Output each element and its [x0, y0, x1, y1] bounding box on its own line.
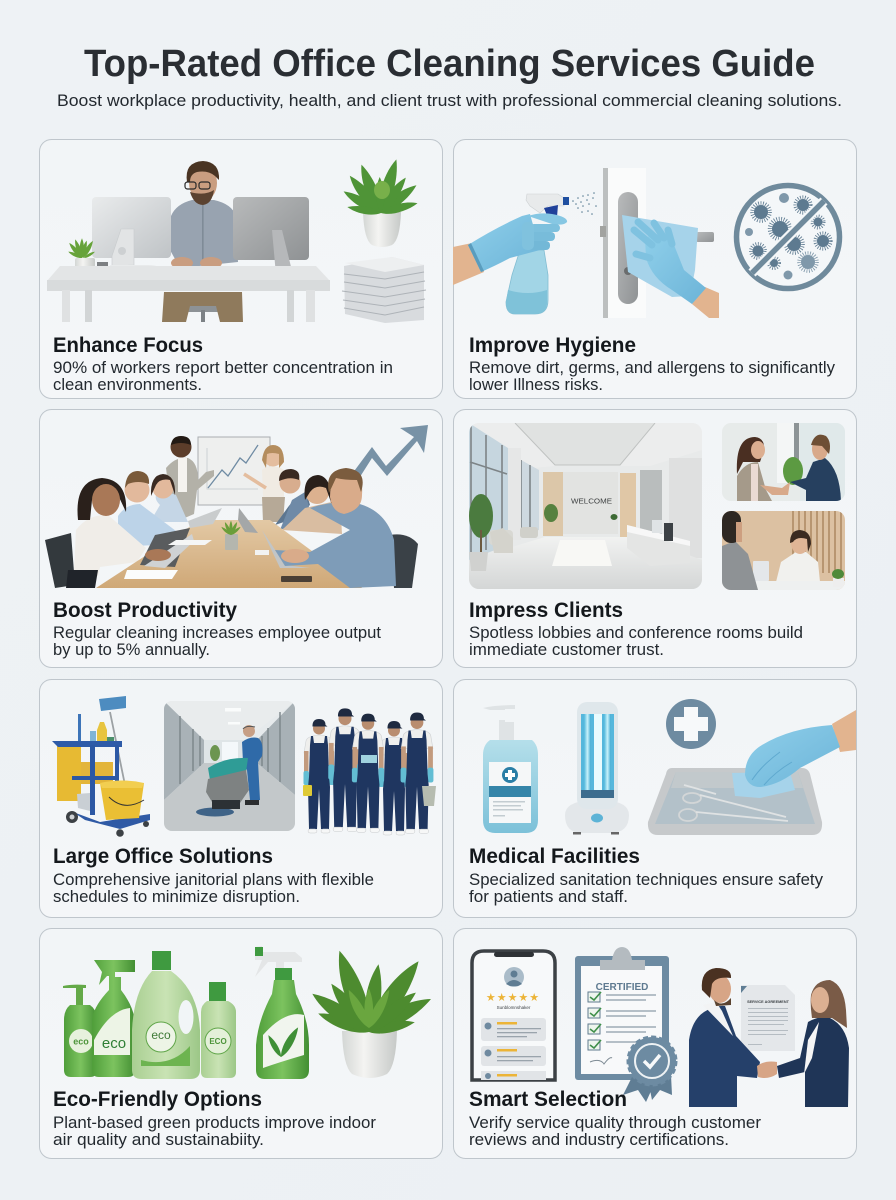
description: Plant-based green products improve indoor [53, 1114, 377, 1132]
panel: impress clients [454, 410, 856, 668]
illustration: eco cleaning bottles: ECO [209, 1037, 227, 1046]
description: reviews and industry certifications. [469, 1131, 729, 1149]
illustration: eco cleaning bottles [63, 946, 309, 1079]
illustration: certified clipboard with badge: CERTIFIED [596, 982, 648, 993]
heading: Large Office Solutions [53, 845, 273, 868]
heading: Smart Selection [469, 1088, 627, 1111]
description: Verify service quality through customer [469, 1114, 762, 1132]
illustration: UV sanitizing lamp [565, 702, 629, 834]
illustration: gloved hands spraying and wiping door handle, no-germs icon [453, 168, 840, 318]
description: Comprehensive janitorial plans with flexible [53, 871, 374, 889]
heading: Eco-Friendly Options [53, 1088, 262, 1111]
description: air quality and sustainabiity. [53, 1131, 264, 1149]
description [53, 624, 381, 659]
illustration: cleaning team in overalls [303, 708, 436, 835]
description: Regular cleaning increases employee output [53, 624, 381, 642]
illustration: businesspeople shaking hands with contract [689, 968, 849, 1107]
description: for patients and staff. [469, 888, 628, 906]
illustration: business handshake photo [722, 423, 845, 501]
heading: Enhance Focus [53, 334, 203, 357]
illustration: man working at desk with plants and papers [47, 158, 426, 323]
illustration: eco cleaning bottles: eco [151, 1028, 171, 1042]
illustration: potted plant [308, 948, 434, 1078]
illustration: floor scrubber in corridor photo [164, 701, 295, 831]
illustration: janitorial cart [52, 696, 150, 837]
illustration: eco cleaning bottles: eco [102, 1035, 126, 1052]
description: Spotless lobbies and conference rooms build [469, 624, 803, 642]
description: schedules to minimize disruption. [53, 888, 300, 906]
panel: large office solutions [40, 680, 442, 918]
heading: Medical Facilities [469, 845, 640, 868]
description [53, 1114, 377, 1149]
illustration: lobby photo with welcome wall [469, 423, 702, 589]
panel: medical facilities [454, 680, 856, 918]
title: Top-Rated Office Cleaning Services Guide [84, 43, 815, 85]
icon: medical cross [666, 699, 716, 749]
panel: eco-friendly options [40, 928, 442, 1158]
illustration: hand sanitizer bottle [483, 705, 538, 833]
subtitle: Boost workplace productivity, health, and client trust with professional commercial cleaning solutions. [57, 92, 842, 110]
illustration: team meeting around table with rising arrow [45, 425, 428, 588]
panel: smart selection [454, 928, 856, 1158]
description: Remove dirt, germs, and allergens to significantly [469, 359, 836, 377]
description: immediate customer trust. [469, 641, 664, 659]
illustration: businesspeople shaking hands with contract: SERVICE AGREEMENT [747, 1000, 790, 1004]
illustration: phone with customer reviews: Sunblomnshaker [497, 1005, 531, 1010]
description [469, 624, 803, 659]
panel: boost productivity [40, 410, 442, 668]
description: Specialized sanitation techniques ensure safety [469, 871, 824, 889]
description [469, 871, 824, 906]
heading: Boost Productivity [53, 599, 237, 622]
description [53, 871, 374, 906]
description: 90% of workers report better concentration in [53, 359, 393, 377]
illustration: instrument tray and gloved hand [648, 710, 856, 835]
description [469, 359, 836, 394]
description [53, 359, 393, 394]
illustration: eco cleaning bottles: eco [73, 1036, 89, 1046]
illustration: phone with customer reviews: ★★★★★ [486, 992, 540, 1004]
panel: enhance focus [40, 140, 442, 398]
description [469, 1114, 762, 1149]
illustration: lobby photo with welcome wall: WELCOME [571, 496, 612, 506]
illustration: phone with customer reviews [472, 951, 555, 1080]
illustration: reception desk photo [722, 511, 845, 590]
illustration: certified clipboard with badge [575, 947, 676, 1102]
description: by up to 5% annually. [53, 641, 210, 659]
description: clean environments. [53, 376, 202, 394]
panel: improve hygiene [453, 140, 856, 398]
heading: Improve Hygiene [469, 334, 636, 357]
heading: Impress Clients [469, 599, 623, 622]
description: lower Illness risks. [469, 376, 603, 394]
